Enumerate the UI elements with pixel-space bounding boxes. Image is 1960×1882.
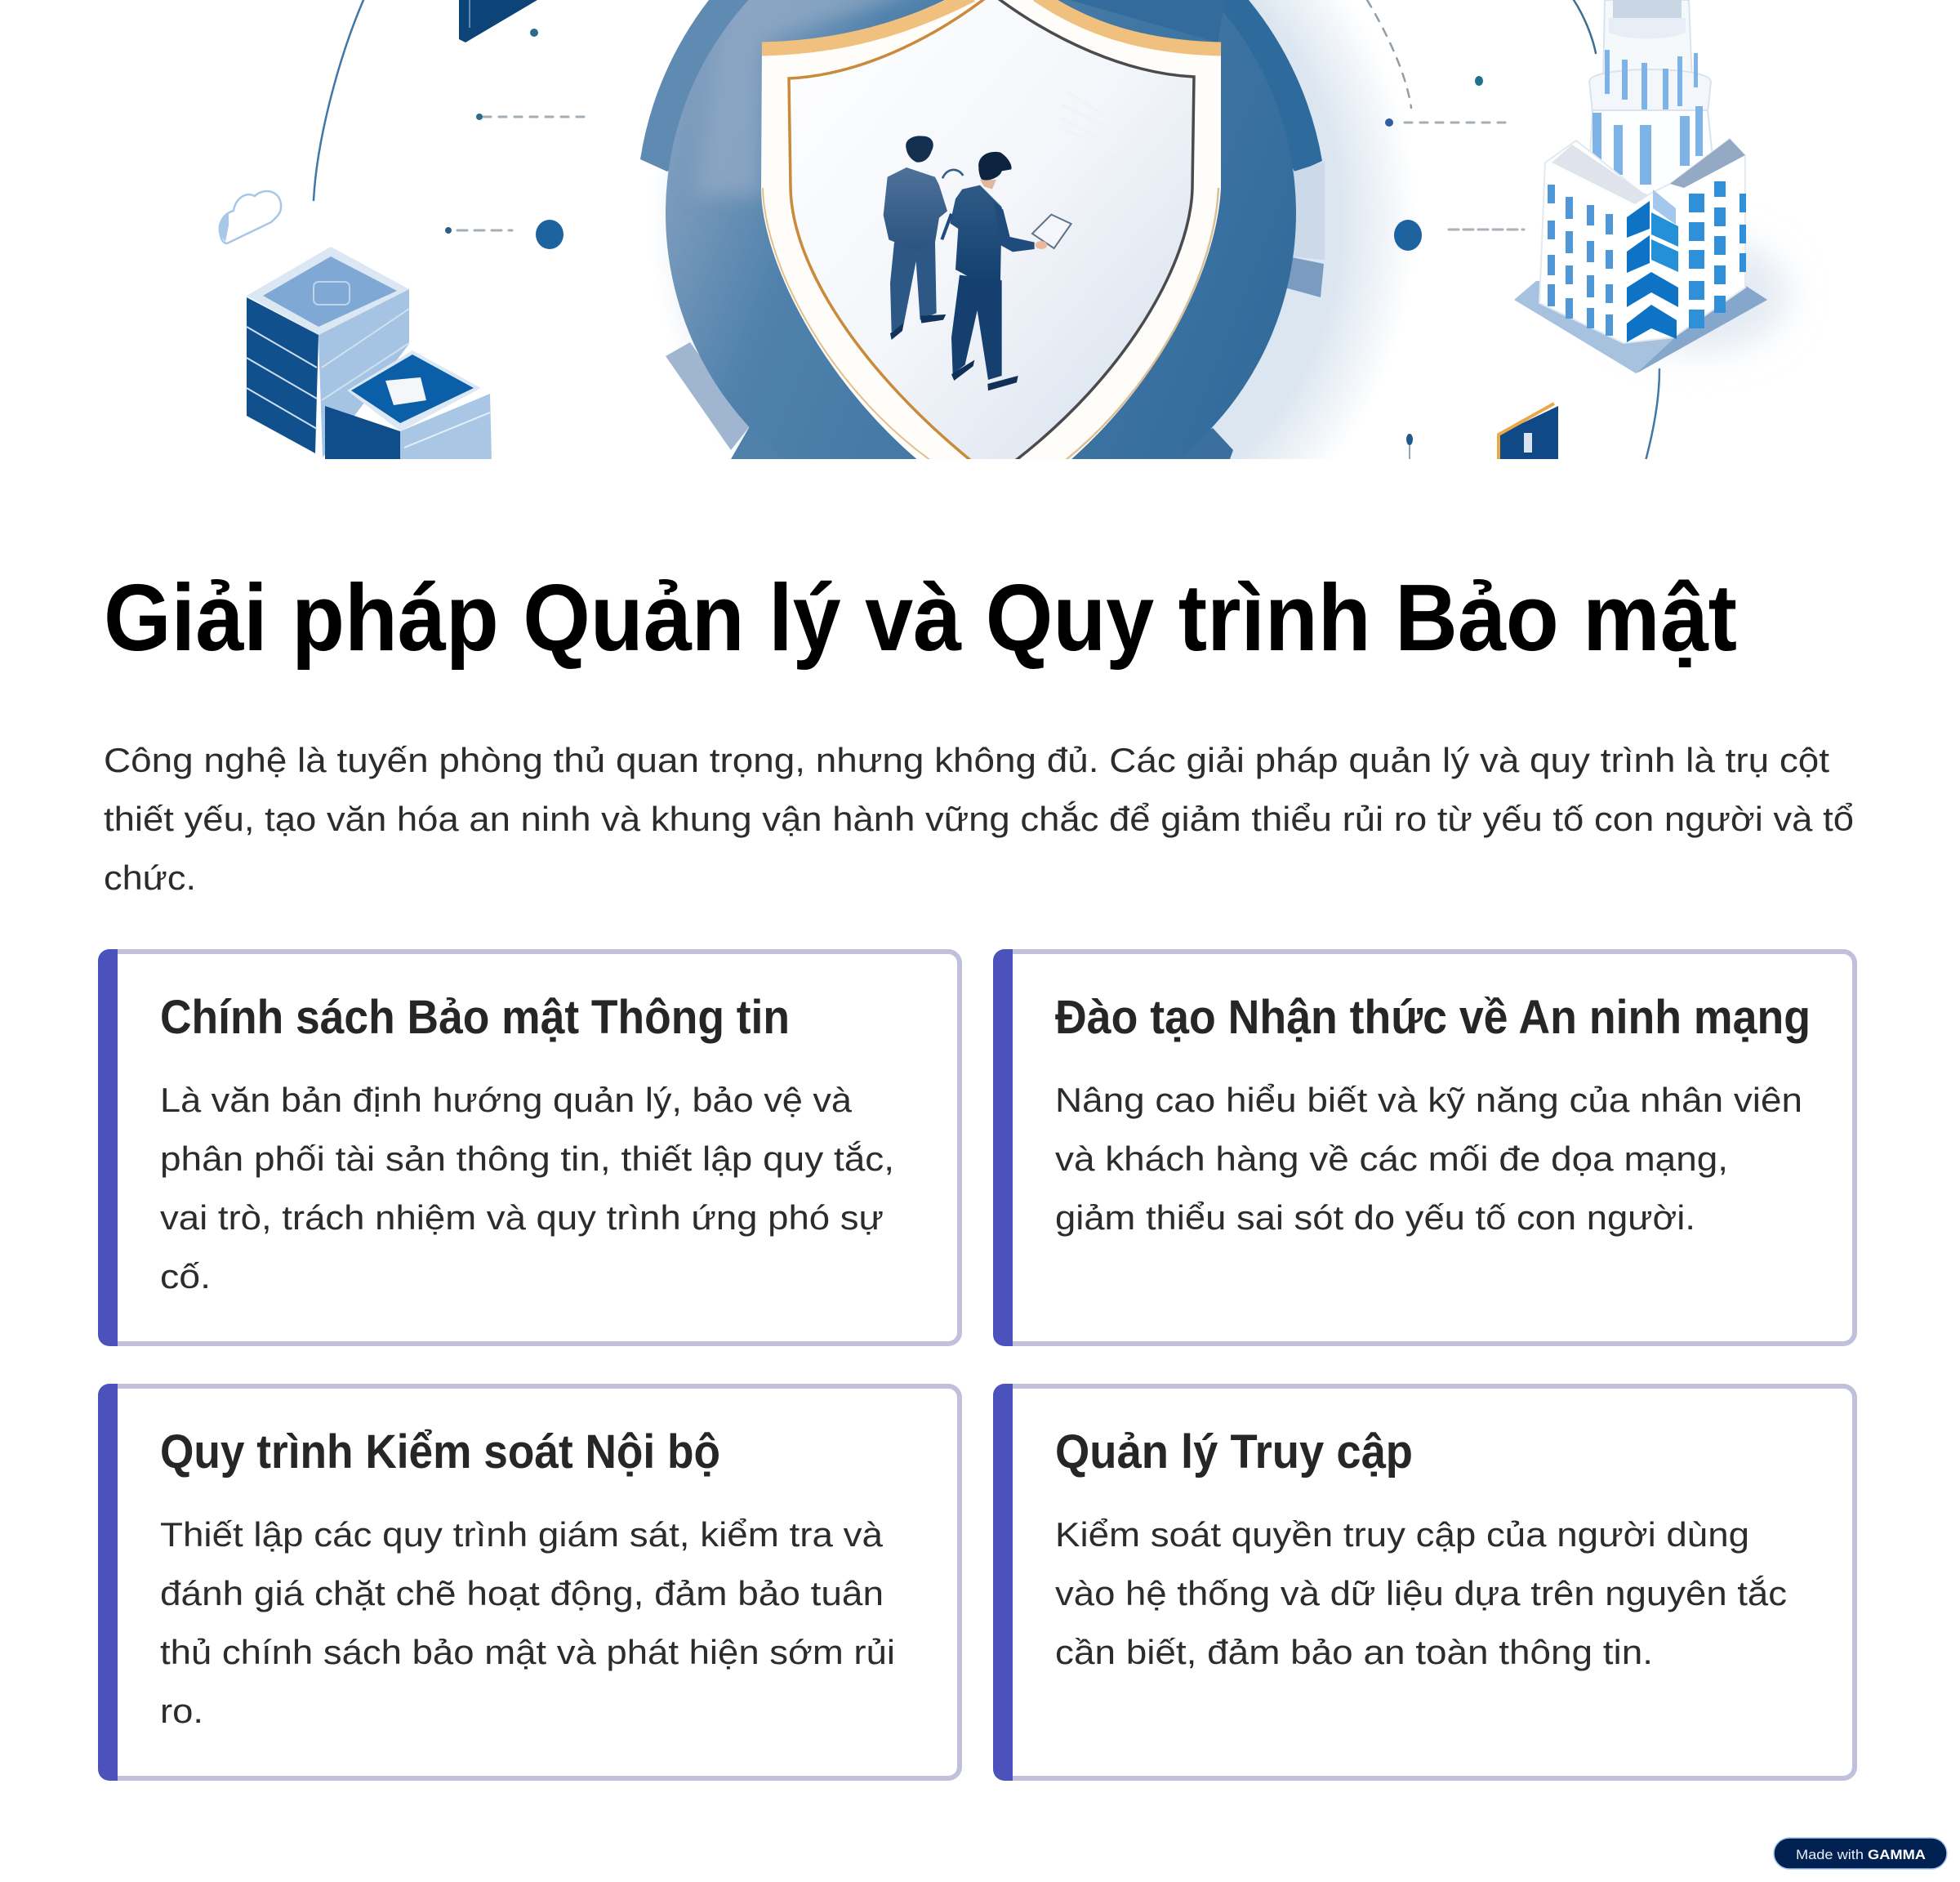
icon: document top xyxy=(459,0,537,42)
tower windows xyxy=(1592,50,1703,185)
intro paragraph: Công nghệ là tuyến phòng thủ quan trọng, nhưng không đủ. Các giải pháp quản lý và quy trình là trụ cột xyxy=(104,741,1829,779)
card text xyxy=(1055,1081,1802,1237)
panel: cybersecurity awareness training xyxy=(993,949,1855,1346)
card text: thủ chính sách bảo mật và phát hiện sớm rủi xyxy=(160,1633,895,1671)
connector lines left xyxy=(314,0,584,249)
card text xyxy=(1055,1515,1787,1671)
card text: đánh giá chặt chẽ hoạt động, đảm bảo tuân xyxy=(160,1574,884,1612)
card heading: Quản lý Truy cập xyxy=(1055,1425,1413,1478)
card text: Kiểm soát quyền truy cập của người dùng xyxy=(1055,1515,1749,1554)
connector lines right xyxy=(1367,0,1659,461)
icon: server stack xyxy=(247,247,492,461)
intro paragraph: chức. xyxy=(104,858,196,897)
panel: information security policy xyxy=(98,949,960,1346)
panel: access management xyxy=(993,1384,1855,1781)
card text: vào hệ thống và dữ liệu dựa trên nguyên tắc xyxy=(1055,1574,1787,1612)
card frame xyxy=(98,949,960,1346)
card text: cố. xyxy=(160,1257,211,1296)
intro paragraph xyxy=(104,741,1854,897)
tower top xyxy=(1589,0,1715,196)
card text xyxy=(160,1081,894,1296)
badge: made with gamma xyxy=(1774,1838,1947,1869)
panel: internal control process xyxy=(98,1384,960,1781)
card frame xyxy=(993,949,1855,1346)
card text: Thiết lập các quy trình giám sát, kiểm tra và xyxy=(160,1515,884,1554)
card text: cần biết, đảm bảo an toàn thông tin. xyxy=(1055,1633,1653,1671)
icon: building xyxy=(1514,0,1788,373)
card text xyxy=(160,1515,895,1730)
person right xyxy=(942,152,1071,390)
card frame xyxy=(993,1384,1855,1781)
intro paragraph: thiết yếu, tạo văn hóa an ninh và khung vận hành vững chắc để giảm thiểu rủi ro từ yếu tố con người và tổ xyxy=(104,800,1854,838)
card heading: Đào tạo Nhận thức về An ninh mạng xyxy=(1055,991,1811,1044)
card text: vai trò, trách nhiệm và quy trình ứng phó sự xyxy=(160,1198,884,1237)
card frame xyxy=(98,1384,960,1781)
icon: document bottom xyxy=(1499,404,1558,461)
card text: và khách hàng về các mối đe dọa mạng, xyxy=(1055,1139,1728,1178)
shield xyxy=(761,0,1221,466)
hero illustration xyxy=(219,0,1795,459)
person left xyxy=(884,136,947,340)
badge: made with gamma: Made with xyxy=(1796,1847,1864,1862)
people xyxy=(884,136,1071,390)
card heading: Quy trình Kiểm soát Nội bộ xyxy=(160,1425,720,1478)
title: Giải pháp Quản lý và Quy trình Bảo mật xyxy=(104,564,1737,671)
card heading: Chính sách Bảo mật Thông tin xyxy=(160,991,790,1044)
gear ring xyxy=(640,0,1325,459)
card text: Là văn bản định hướng quản lý, bảo vệ và xyxy=(160,1081,853,1119)
icon: cloud xyxy=(220,191,281,243)
card text: Nâng cao hiểu biết và kỹ năng của nhân viên xyxy=(1055,1081,1802,1119)
badge: made with gamma: GAMMA xyxy=(1868,1847,1926,1862)
card text: phân phối tài sản thông tin, thiết lập quy tắc, xyxy=(160,1139,894,1178)
card text: giảm thiểu sai sót do yếu tố con người. xyxy=(1055,1198,1695,1237)
soft halo behind gear xyxy=(670,0,1400,459)
card text: ro. xyxy=(160,1692,203,1730)
lower block xyxy=(1539,139,1745,343)
